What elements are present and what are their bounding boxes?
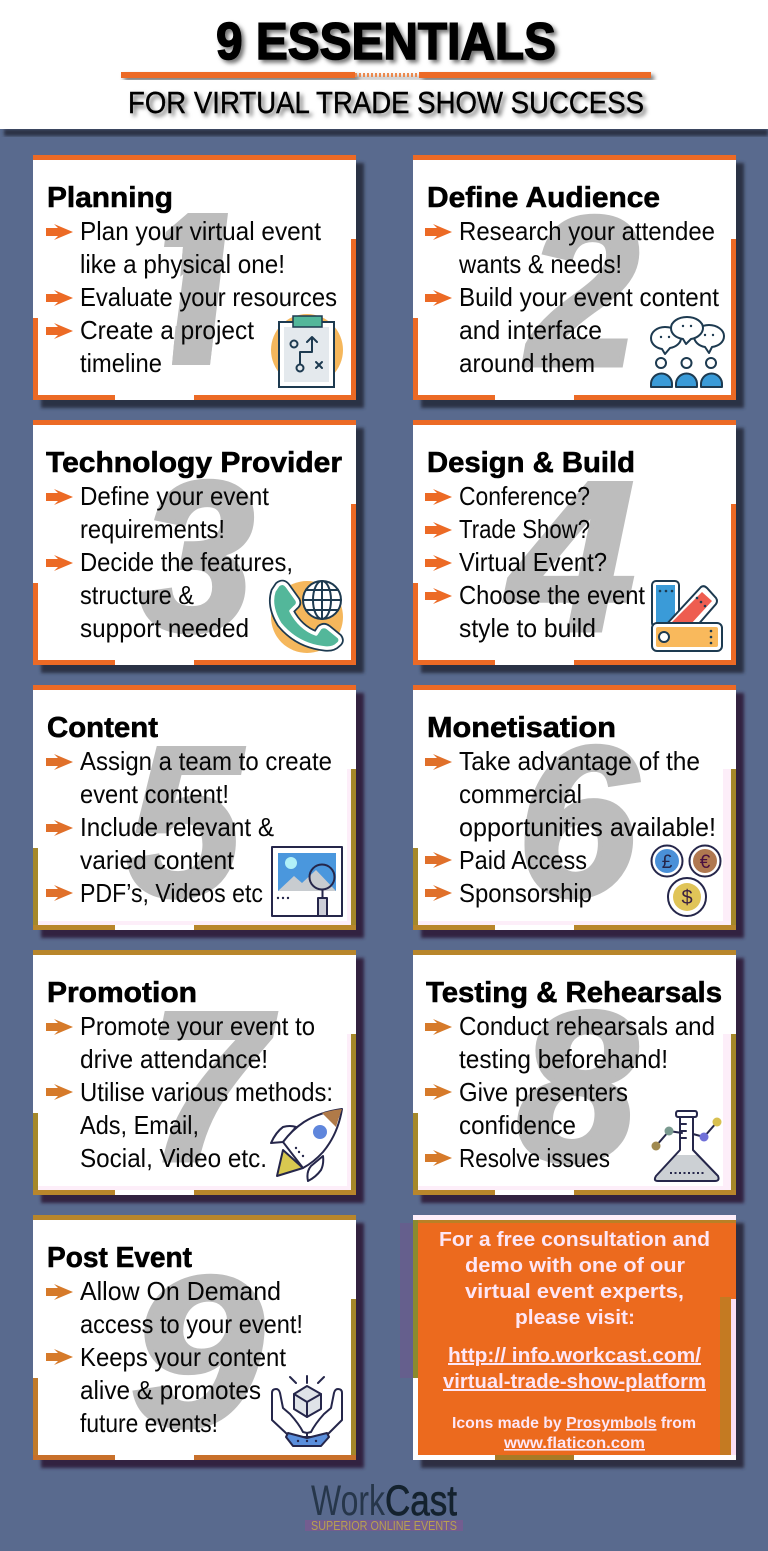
text block xyxy=(80,746,332,908)
logo: WorkCast: Cast xyxy=(385,1477,457,1525)
text block: Decide the features, xyxy=(80,547,293,577)
heading: Monetisation xyxy=(427,712,616,744)
logo: WorkCast xyxy=(305,1477,463,1533)
text block xyxy=(458,216,720,378)
call to action text: Icons made by Prosymbols from xyxy=(452,1415,696,1432)
text block: and interface xyxy=(459,315,602,345)
big number 7: 7 xyxy=(147,968,276,1206)
icon: coins: € xyxy=(700,852,711,873)
text block: Choose the event xyxy=(459,580,646,610)
heading: Post Event xyxy=(47,1242,192,1274)
icon: coins: $ xyxy=(681,887,693,909)
text block xyxy=(459,746,716,908)
text block: Define your event xyxy=(80,481,270,511)
heading: Planning xyxy=(47,182,173,214)
text block: Evaluate your resources xyxy=(80,282,337,312)
icon: flask xyxy=(652,1111,722,1181)
call to action text: For a free consultation and xyxy=(439,1229,710,1251)
arrows xyxy=(425,754,452,901)
icon: coins: £ xyxy=(662,852,673,873)
call to action text: virtual event experts, xyxy=(465,1281,684,1303)
heading: Testing & Rehearsals xyxy=(426,977,722,1009)
text block: like a physical one! xyxy=(80,249,285,279)
arrows xyxy=(46,754,73,901)
icon: phone and globe xyxy=(271,581,343,653)
big number 9: 9 xyxy=(130,1233,263,1471)
text block xyxy=(80,1276,303,1438)
text block: Allow On Demand xyxy=(80,1276,281,1306)
arrows xyxy=(46,1284,73,1365)
text block: confidence xyxy=(459,1110,576,1140)
header band xyxy=(0,0,768,129)
text block: structure & xyxy=(80,580,194,610)
text block: Utilise various methods: xyxy=(80,1077,333,1107)
heading: Technology Provider xyxy=(46,447,342,479)
text block xyxy=(80,481,293,643)
logo: WorkCast: Work xyxy=(311,1477,385,1525)
big number 6: 6 xyxy=(517,703,639,941)
text block: PDF’s, Videos etc xyxy=(80,878,263,908)
big number 4: 4 xyxy=(505,438,635,676)
icon: image search xyxy=(272,847,342,916)
panel: 8 Testing & Rehearsals xyxy=(413,950,744,1206)
panel: 1 Planning xyxy=(33,155,364,411)
text block: Conference? xyxy=(459,481,590,511)
panel: call to action xyxy=(400,1215,744,1468)
panel: 2 Define Audience xyxy=(413,155,744,411)
panel: 3 Technology Provider xyxy=(33,420,364,676)
arrows xyxy=(425,224,452,306)
heading: Content xyxy=(47,712,158,744)
text block: timeline xyxy=(80,348,162,378)
title: 9 ESSENTIALS xyxy=(216,13,556,71)
call to action text: demo with one of our xyxy=(465,1255,685,1277)
text block: Resolve issues xyxy=(459,1143,610,1173)
text block: Social, Video etc. xyxy=(80,1143,267,1173)
text block: requirements! xyxy=(80,514,225,544)
text block: alive & promotes xyxy=(80,1375,261,1405)
text block: Create a project xyxy=(80,315,255,345)
text block: Conduct rehearsals and xyxy=(459,1011,715,1041)
text block: Research your attendee xyxy=(459,216,715,246)
text block xyxy=(80,216,337,378)
big number 5: 5 xyxy=(127,703,243,941)
big number 3: 3 xyxy=(140,438,254,676)
icon: clipboard xyxy=(271,314,343,387)
text block: commercial xyxy=(459,779,582,809)
text block xyxy=(80,1011,333,1173)
icon: rocket xyxy=(271,1109,342,1181)
panel: 4 Design & Build xyxy=(413,420,744,676)
arrows xyxy=(46,224,73,339)
call to action text: www.flaticon.com xyxy=(503,1435,645,1452)
text block: Paid Access xyxy=(459,845,587,875)
text block: Assign a team to create xyxy=(80,746,332,776)
arrows xyxy=(46,489,73,571)
text block: Promote your event to xyxy=(80,1011,315,1041)
call to action text: http:// info.workcast.com/ xyxy=(448,1345,701,1367)
text block: support needed xyxy=(80,613,249,643)
heading: Promotion xyxy=(47,977,197,1009)
icon: hands and cube xyxy=(272,1376,342,1446)
text block: Keeps your content xyxy=(80,1342,287,1372)
arrows xyxy=(46,1019,73,1100)
arrows xyxy=(425,489,452,604)
text block: Give presenters xyxy=(459,1077,628,1107)
text block: Virtual Event? xyxy=(459,547,607,577)
subtitle: FOR VIRTUAL TRADE SHOW SUCCESS xyxy=(128,85,644,120)
text block: event content! xyxy=(80,779,229,809)
logo: WorkCast: SUPERIOR ONLINE EVENTS xyxy=(311,1519,457,1533)
text block: wants & needs! xyxy=(458,249,622,279)
text block xyxy=(459,481,646,643)
panel: 7 Promotion xyxy=(33,950,364,1206)
heading: Define Audience xyxy=(427,182,660,214)
big number 2: 2 xyxy=(523,173,639,411)
text block xyxy=(459,1011,715,1173)
text block: access to your event! xyxy=(80,1309,303,1339)
text block: future events! xyxy=(80,1408,218,1438)
text block: testing beforehand! xyxy=(459,1044,668,1074)
text block: Take advantage of the xyxy=(459,746,700,776)
text block: style to build xyxy=(459,613,596,643)
arrows xyxy=(425,1019,452,1166)
text block: around them xyxy=(459,348,595,378)
heading: Design & Build xyxy=(427,447,635,479)
text block: varied content xyxy=(80,845,235,875)
icon: coins xyxy=(652,846,720,916)
title rule xyxy=(121,72,651,78)
text block: drive attendance! xyxy=(80,1044,268,1074)
panel: 9 Post Event xyxy=(33,1215,364,1471)
text block: Build your event content xyxy=(459,282,720,312)
icon: audience xyxy=(651,317,724,387)
call to action text xyxy=(439,1229,710,1452)
text block: Trade Show? xyxy=(459,514,590,544)
text block: Plan your virtual event xyxy=(80,216,322,246)
text block: Ads, Email, xyxy=(80,1110,199,1140)
big number 1: 1 xyxy=(155,173,235,411)
text block: Include relevant & xyxy=(80,812,274,842)
panel: 5 Content xyxy=(33,685,364,941)
call to action text: virtual-trade-show-platform xyxy=(443,1371,706,1393)
text block: Sponsorship xyxy=(459,878,592,908)
panel: 6 Monetisation xyxy=(413,685,744,941)
call to action text: please visit: xyxy=(515,1307,635,1329)
icon: swatches xyxy=(652,581,722,651)
big number 8: 8 xyxy=(517,968,638,1206)
text block: opportunities available! xyxy=(459,812,716,842)
